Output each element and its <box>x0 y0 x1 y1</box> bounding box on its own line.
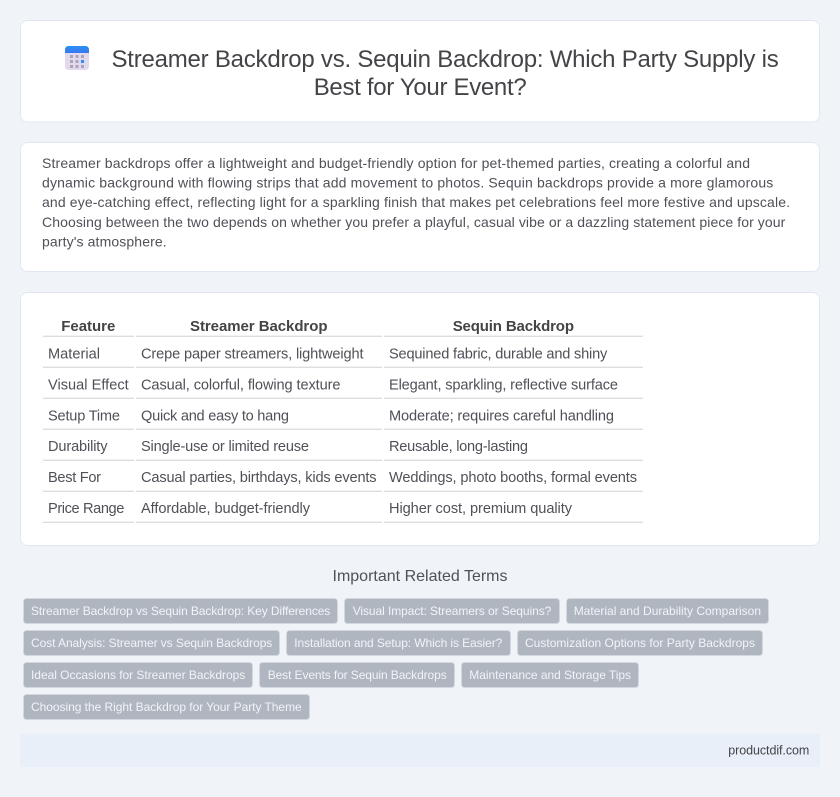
table header: Streamer Backdrop <box>190 318 328 335</box>
title: Streamer Backdrop vs. Sequin Backdrop: Which Party Supply is <box>112 46 779 73</box>
tags: related terms <box>24 598 768 720</box>
row: material <box>43 346 643 367</box>
row: best for: Weddings, photo booths, formal events <box>389 470 637 486</box>
intro text: and eye-catching effect, reflecting light for a sparkling finish that makes pet celebrations feel more festive and upscale. <box>42 194 790 210</box>
intro text: Choosing between the two depends on whether you prefer a playful, casual vibe or a dazzling statement piece for your <box>42 214 786 230</box>
tag <box>344 598 560 624</box>
header panel <box>20 20 820 122</box>
row: price range: Higher cost, premium quality <box>389 501 573 517</box>
row: material: Crepe paper streamers, lightweight <box>141 346 364 362</box>
row: best for: Best For <box>48 470 101 486</box>
table header <box>43 318 643 336</box>
intro text: Streamer backdrops offer a lightweight and budget-friendly option for pet-themed parties, creating a colorful and <box>42 155 750 171</box>
row: setup time: Setup Time <box>48 408 120 424</box>
icon: calendar <box>65 46 89 70</box>
row: best for <box>43 470 643 491</box>
tag <box>518 630 762 656</box>
tag: Installation and Setup: Which is Easier? <box>294 636 503 650</box>
tag: Customization Options for Party Backdrops <box>525 636 755 650</box>
row: visual effect: Casual, colorful, flowing texture <box>141 377 340 393</box>
row: durability: Reusable, long-lasting <box>389 439 528 455</box>
panel: comparison table <box>20 292 820 546</box>
tag <box>24 694 310 720</box>
row: material: Sequined fabric, durable and shiny <box>389 346 608 362</box>
row: visual effect: Visual Effect <box>48 377 129 393</box>
tag: Material and Durability Comparison <box>574 604 761 618</box>
tag: Maintenance and Storage Tips <box>469 668 631 682</box>
footer source text: productdif.com <box>728 743 809 757</box>
tag <box>286 630 510 656</box>
tag <box>24 662 252 688</box>
tag: Ideal Occasions for Streamer Backdrops <box>31 668 245 682</box>
row: price range: Affordable, budget-friendly <box>141 501 311 517</box>
row: material: Material <box>48 346 100 362</box>
table header: Sequin Backdrop <box>453 318 574 335</box>
row: durability: Single-use or limited reuse <box>141 439 309 455</box>
footer <box>20 734 820 767</box>
row: visual effect: Elegant, sparkling, reflective surface <box>389 377 618 393</box>
panel: intro paragraph <box>20 142 820 272</box>
tag: Best Events for Sequin Backdrops <box>268 668 447 682</box>
row: price range: Price Range <box>48 501 124 517</box>
intro text: party's atmosphere. <box>42 233 167 249</box>
tag: Choosing the Right Backdrop for Your Party Theme <box>31 700 302 714</box>
row: durability <box>43 439 643 460</box>
tag <box>566 598 768 624</box>
row: durability: Durability <box>48 439 108 455</box>
tag: Streamer Backdrop vs Sequin Backdrop: Key Differences <box>31 604 330 618</box>
intro text <box>42 155 790 249</box>
row: price range <box>43 501 643 522</box>
tag: Visual Impact: Streamers or Sequins? <box>353 604 552 618</box>
row: setup time: Moderate; requires careful handling <box>389 408 614 424</box>
title: Best for Your Event? <box>314 74 527 101</box>
tag <box>24 598 338 624</box>
row: best for: Casual parties, birthdays, kids events <box>141 470 377 486</box>
tag <box>260 662 454 688</box>
intro text: dynamic background with flowing strips that add movement to photos. Sequin backdrops provide a more glamorous <box>42 175 773 191</box>
row: visual effect <box>43 377 643 398</box>
tag: Cost Analysis: Streamer vs Sequin Backdrops <box>31 636 272 650</box>
tag <box>462 662 638 688</box>
title <box>112 46 779 101</box>
table header: Feature <box>61 318 115 335</box>
tag <box>24 630 280 656</box>
row: setup time <box>43 408 643 429</box>
row: setup time: Quick and easy to hang <box>141 408 289 424</box>
heading: important related terms: Important Related Terms <box>332 568 508 585</box>
